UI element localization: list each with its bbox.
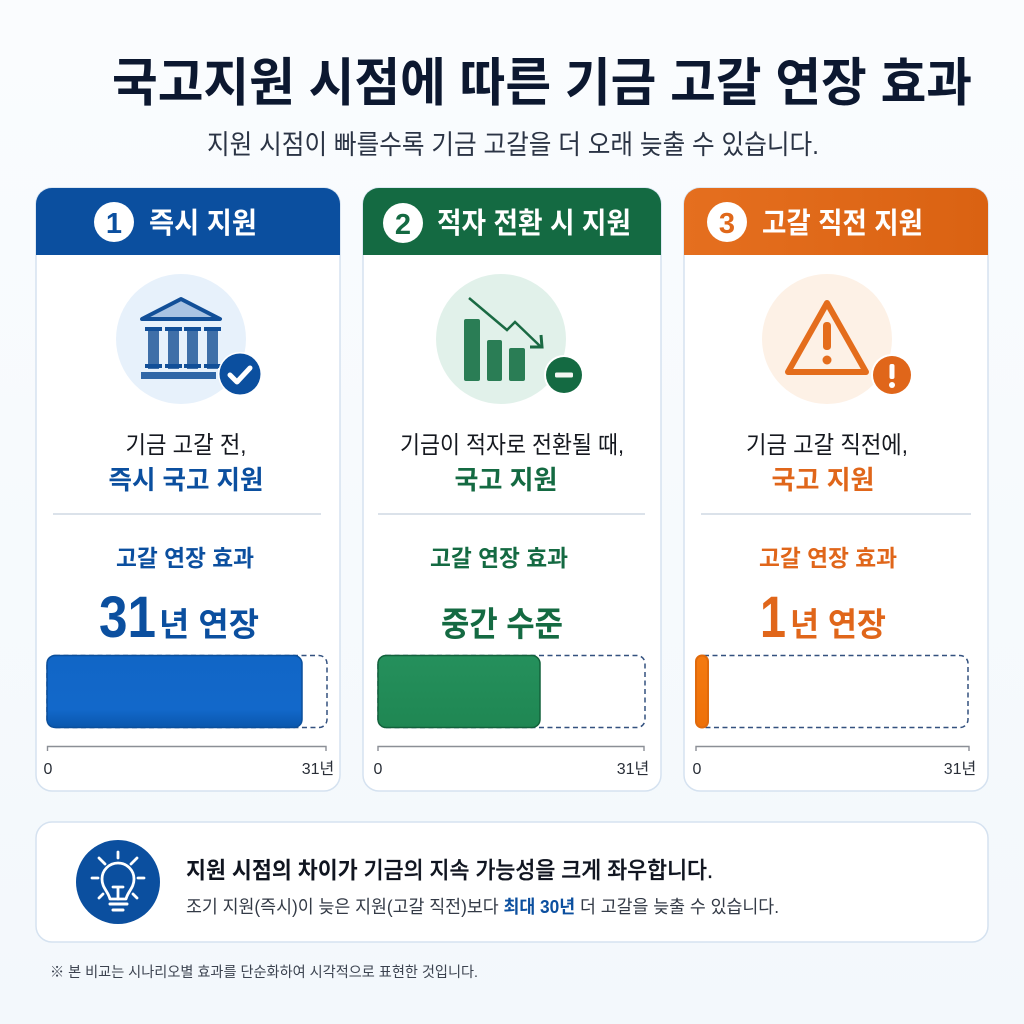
callout text: 조기 지원(즉시)이 늦은 지원(고갈 직전)보다 최대 30년 더 고갈을 늦출 수 있습니다. [186,897,779,917]
bar chart: 중간 수준 [374,656,649,778]
description: 국고 지원 [454,465,558,495]
header: 즉시 지원 [36,188,340,255]
description: 즉시 국고 지원 [108,465,264,495]
effect value [760,585,886,650]
header: 즉시 지원: 즉시 지원 [149,207,257,240]
effect value: 31 [99,585,156,650]
header: 고갈 직전 지원: 3 [719,208,735,240]
bar chart: 31년 [44,656,334,778]
icon: warning triangle [762,274,913,404]
icon: falling bar chart with minus [436,274,584,404]
effect label: 고갈 연장 효과 [430,545,568,571]
bar chart: 1년: 31년 [944,760,976,778]
description: 기금이 적자로 전환될 때, [400,432,624,459]
effect label: 고갈 연장 효과 [116,545,254,571]
bar chart: 31년: 0 [44,761,53,778]
panel: 고갈 직전 지원 [684,188,988,791]
bar chart: 1년 [693,656,976,778]
description: 기금 고갈 직전에, [746,432,908,459]
callout text: 지원 시점의 차이가 기금의 지속 가능성을 크게 좌우합니다. [186,857,713,883]
header: 적자 전환 시 지원: 2 [395,209,411,241]
effect value: 중간 수준 [441,606,563,644]
effect value [99,585,259,650]
effect label: 고갈 연장 효과 [759,545,897,571]
effect value: 1 [760,585,786,650]
icon: light bulb [76,840,160,924]
callout text [186,857,779,917]
panel: 즉시 지원 [36,188,340,791]
description [400,432,624,495]
description: 기금 고갈 전, [126,432,246,459]
bar chart: 중간 수준: 0 [374,761,383,778]
header: 즉시 지원: 1 [106,208,122,240]
description: 국고 지원 [772,465,874,495]
bar chart: 중간 수준: 31년 [617,760,649,778]
header: 적자 전환 시 지원: 적자 전환 시 지원 [437,207,631,240]
effect value: 년 연장 [790,606,886,643]
callout: key takeaway [36,822,988,942]
title: 국고지원 시점에 따른 기금 고갈 연장 효과 [112,55,972,113]
header: 고갈 직전 지원: 고갈 직전 지원 [762,207,923,240]
header: 적자 전환 시 지원 [363,188,661,255]
footnote: ※ 본 비교는 시나리오별 효과를 단순화하여 시각적으로 표현한 것입니다. [50,964,478,981]
subtitle: 지원 시점이 빠를수록 기금 고갈을 더 오래 늦출 수 있습니다. [207,130,819,160]
bar chart: 1년: 0 [693,761,702,778]
icon: bank with check [116,274,262,404]
header: 고갈 직전 지원 [684,188,988,255]
bar chart: 31년: 31년 [302,760,334,778]
description [108,432,264,495]
panel: 적자 전환 시 지원 [363,188,661,791]
description [746,432,908,495]
effect value: 년 연장 [159,606,259,643]
